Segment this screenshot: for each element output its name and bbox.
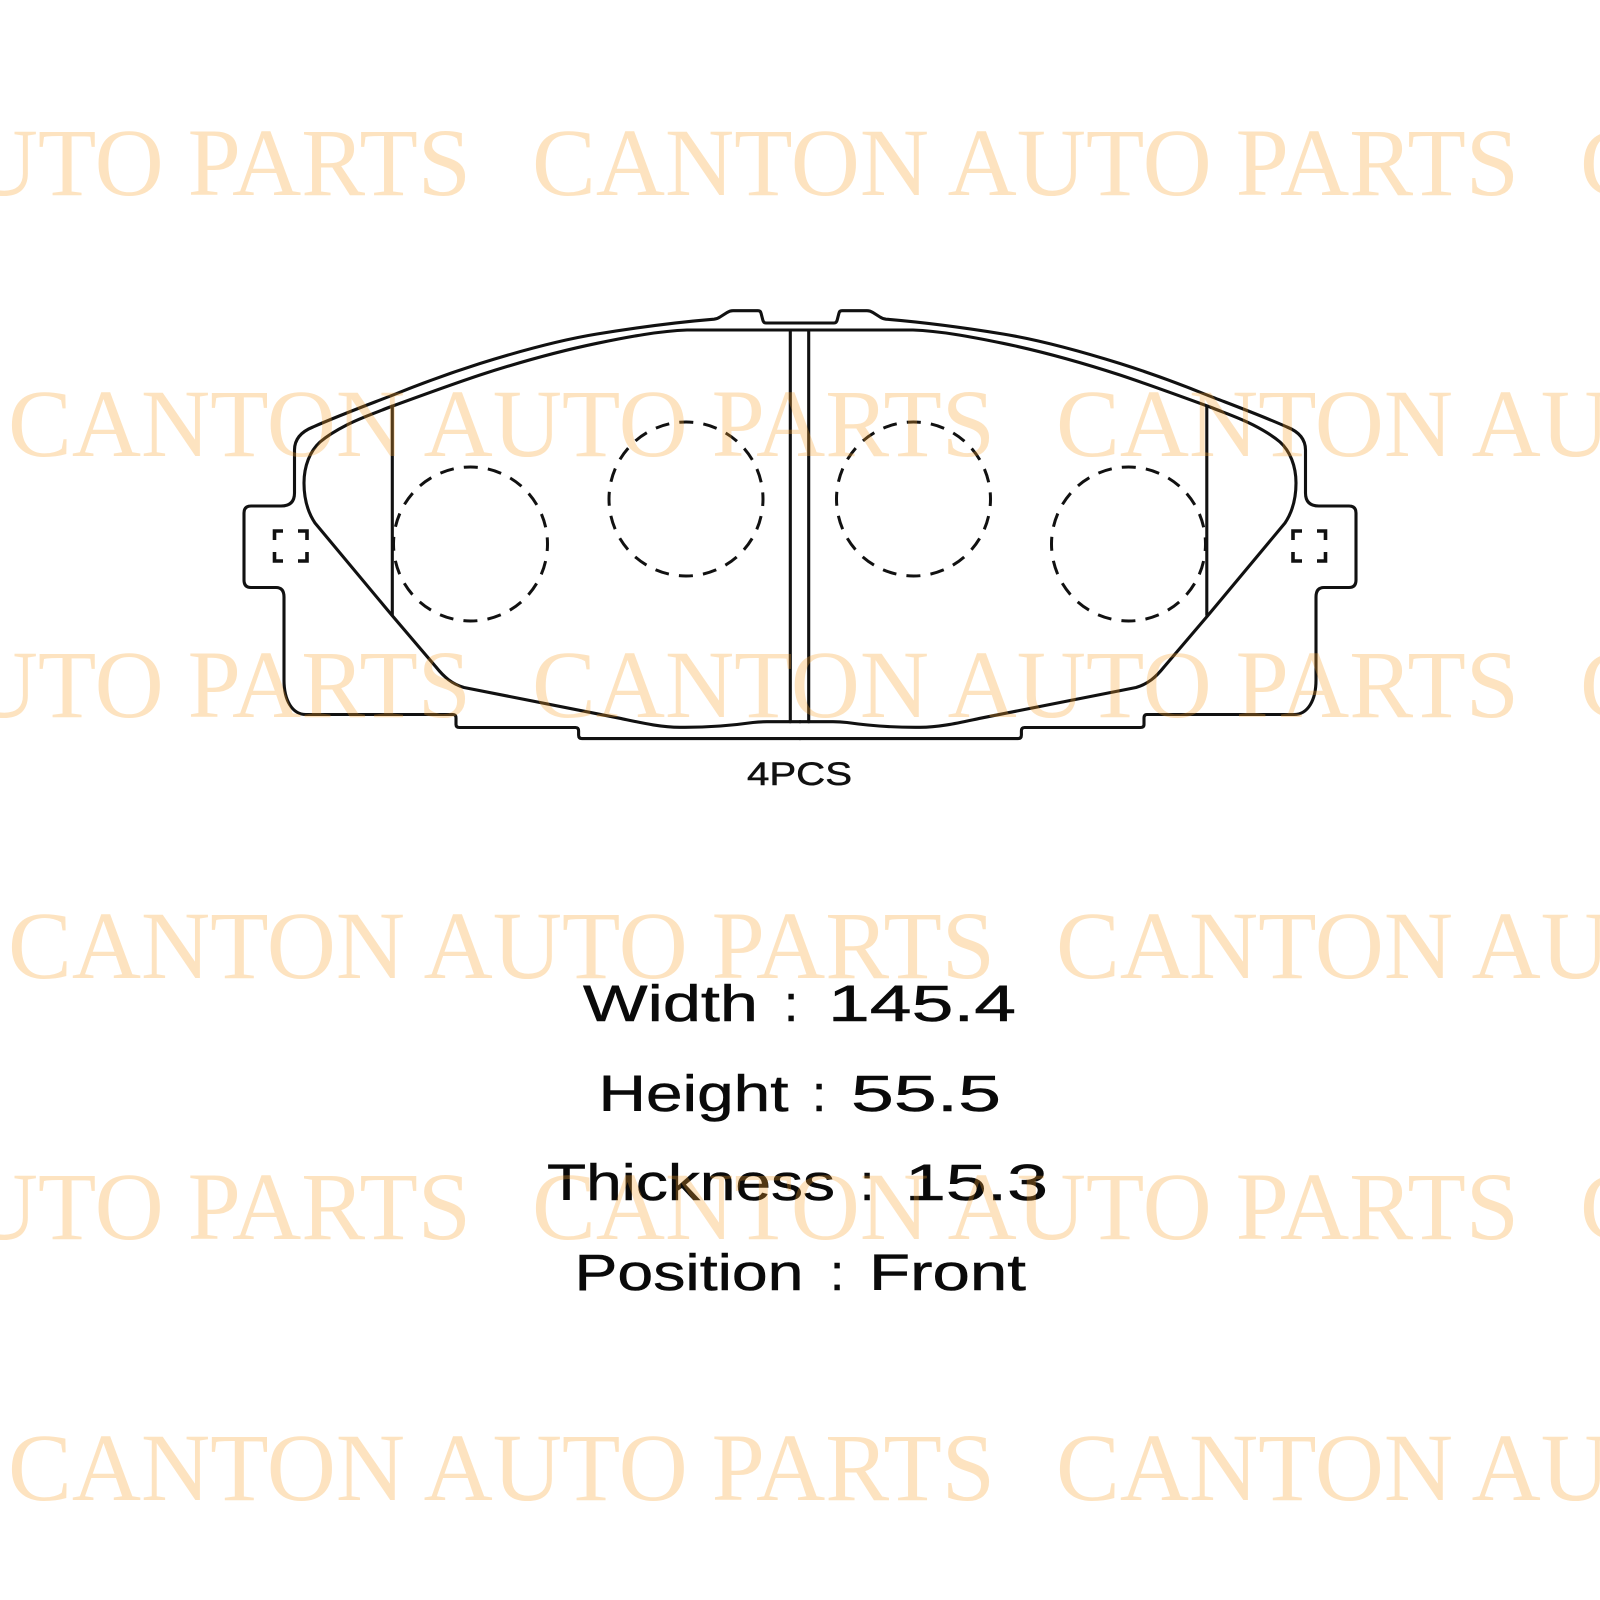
piston circle, lower left	[394, 467, 548, 621]
thickness spec: :	[860, 1154, 874, 1211]
height spec: :	[812, 1065, 826, 1122]
piston circle, upper right	[836, 422, 990, 576]
backing plate outline, left half	[244, 311, 800, 739]
thickness spec: Thickness	[547, 1154, 835, 1211]
width spec: :	[784, 975, 798, 1032]
height spec: 55.5	[851, 1065, 1001, 1122]
specification list	[547, 975, 1048, 1301]
watermark: CANTON AUTO PARTS	[8, 370, 995, 477]
position spec: Front	[869, 1244, 1026, 1301]
friction material outline, left half	[304, 330, 800, 727]
position spec: Position	[574, 1244, 804, 1301]
backing plate outline, right half	[800, 311, 1356, 739]
width spec: 145.4	[828, 975, 1016, 1032]
quantity label: 4PCS	[747, 756, 852, 792]
height spec	[598, 1065, 1001, 1122]
watermark: CANTON AUTO PARTS	[532, 631, 1519, 738]
watermark: CANTON AUTO PARTS	[532, 1153, 1519, 1260]
watermark: CANTON AUTO PARTS	[8, 892, 995, 999]
left dashed square	[274, 531, 307, 561]
centre slot	[790, 330, 809, 722]
watermark: CANTON AUTO PARTS	[8, 1414, 995, 1521]
chamfer lines	[392, 406, 1207, 615]
friction material outline, right half	[800, 330, 1296, 727]
thickness spec: 15.3	[905, 1154, 1048, 1211]
piston circle, lower right	[1052, 467, 1206, 621]
position spec	[574, 1244, 1026, 1301]
position spec: :	[830, 1244, 844, 1301]
thickness spec	[547, 1154, 1048, 1211]
width spec	[583, 975, 1016, 1032]
brake pad diagram	[244, 311, 1356, 739]
right dashed square	[1293, 531, 1326, 561]
width spec: Width	[583, 975, 758, 1032]
height spec: Height	[598, 1065, 788, 1122]
watermark: CANTON AUTO PARTS	[532, 109, 1519, 216]
piston circle, upper left	[609, 422, 763, 576]
